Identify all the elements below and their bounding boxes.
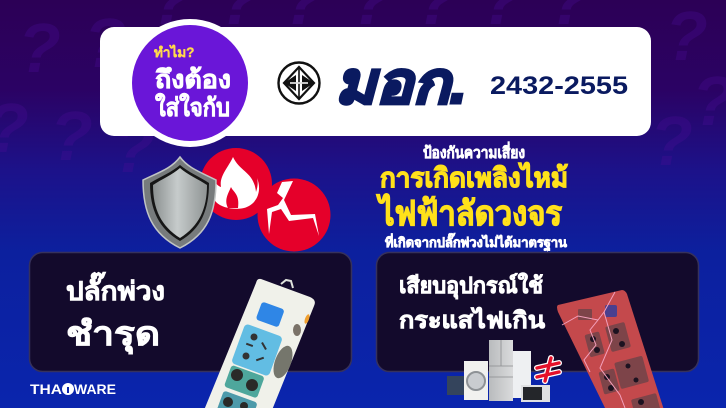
- heading: fire: การเกิดเพลิงไหม้: [380, 162, 568, 193]
- image: overloaded red power strip: [557, 290, 664, 408]
- text: ?: [112, 109, 155, 187]
- panel: overcurrent: กระแสไฟเกิน: [399, 306, 545, 333]
- TIS wordmark: มอก.: [335, 51, 467, 116]
- image: damaged power strip: [200, 279, 315, 408]
- badge: why care: ทำไม?: [154, 44, 194, 60]
- icon: shield: [143, 157, 216, 248]
- panel: overcurrent: เสียบอุปกรณ์ใช้: [399, 272, 543, 300]
- text: ?: [84, 4, 127, 82]
- logo: Thaiware: [30, 382, 116, 397]
- panel: damaged plug: ชำรุด: [66, 315, 160, 355]
- text: ?: [50, 97, 93, 175]
- text: ?: [18, 9, 61, 87]
- standard number: 2432-2555: [490, 72, 628, 100]
- image: appliances: [447, 340, 550, 402]
- badge: why care: ใส่ใจกับ: [155, 92, 230, 122]
- logo: Thaiware: THA: [30, 382, 62, 397]
- badge: why care: [126, 19, 254, 147]
- subheading: ที่เกิดจากปลั๊กพ่วงไม่ได้มาตรฐาน: [385, 233, 567, 252]
- icon: short circuit crack in red circle: [258, 178, 330, 252]
- text: ?: [650, 102, 693, 180]
- icon: not equal sign: [537, 358, 559, 381]
- panel: damaged plug: ปลั๊กพ่วง: [66, 272, 165, 306]
- panel: overcurrent: [376, 252, 698, 372]
- icon: TIS logo: [278, 62, 320, 104]
- badge: why care: ถึงต้อง: [155, 66, 231, 94]
- panel: damaged plug: [30, 252, 352, 372]
- logo: Thaiware: WARE: [74, 382, 116, 397]
- icon: fire in red circle: [200, 148, 272, 220]
- heading: short circuit: ไฟฟ้าลัดวงจร: [376, 193, 563, 233]
- heading: prevent risk: ป้องกันความเสี่ยง: [423, 141, 525, 162]
- header panel: [100, 19, 651, 147]
